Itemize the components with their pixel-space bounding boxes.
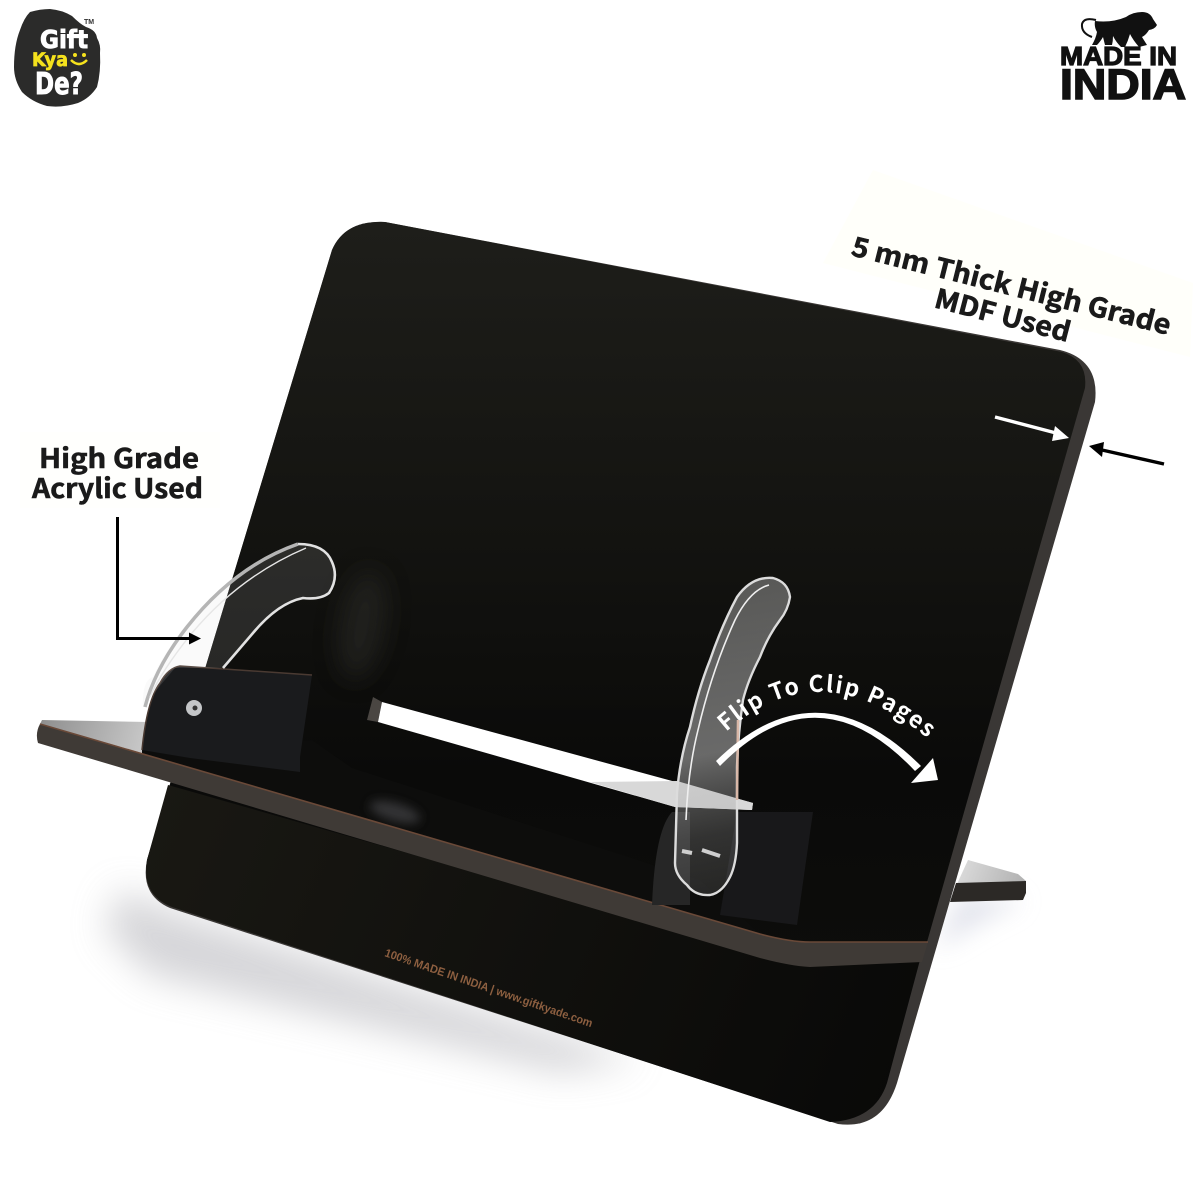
right acrylic clip <box>675 578 790 895</box>
panel lower face <box>146 785 920 1122</box>
curved label: Flip To Clip Pages <box>716 674 934 736</box>
shelf tip top surface <box>40 720 150 754</box>
lion icon <box>1082 12 1157 47</box>
logo blob <box>14 9 100 107</box>
elbow arrow <box>118 517 201 644</box>
badge: Made in India <box>1060 12 1186 109</box>
panel front face <box>147 222 1085 1000</box>
callout: acrylic <box>31 437 203 644</box>
callout text line 1: 5 mm Thick High Grade <box>848 225 1176 343</box>
shelf brown edge line <box>40 724 928 942</box>
logo word: Gift: Gift <box>40 25 88 54</box>
logo word: Kya: Kya <box>32 49 68 71</box>
callout text line 2: MDF Used <box>931 277 1075 350</box>
callout text line 1: High Grade <box>39 437 199 476</box>
right foot of the stand <box>950 860 1026 902</box>
right mounting block <box>652 812 813 925</box>
slot in panel <box>367 697 753 810</box>
logo smile <box>71 53 87 64</box>
book stand back panel <box>146 222 1096 1125</box>
engraved brand text: 100% MADE IN INDIA | www.giftkyade.com <box>383 947 594 1030</box>
panel side edge <box>146 222 1096 1125</box>
shelf highlight <box>368 796 422 828</box>
acrylic reflection on panel <box>331 567 393 683</box>
logo trademark: TM <box>84 19 94 26</box>
white arrow <box>995 417 1069 441</box>
shelf front edge <box>37 724 928 967</box>
left acrylic clip <box>143 544 336 707</box>
floor shadow <box>105 890 1025 1072</box>
curved arrow <box>716 713 938 783</box>
screw <box>186 700 202 716</box>
left mounting block with screw <box>142 666 312 772</box>
badge line 2: INDIA <box>1060 61 1186 109</box>
logo: Gift Kya De <box>14 9 100 107</box>
shelf top surface <box>142 740 760 934</box>
badge line 1: MADE IN <box>1060 41 1177 71</box>
callout text line 2: Acrylic Used <box>31 467 203 506</box>
callout: flip to clip pages <box>716 674 938 783</box>
logo word: De?: De? <box>35 67 83 102</box>
background cream patches <box>20 170 1193 508</box>
callout: MDF thickness <box>848 225 1176 464</box>
black arrow <box>1089 442 1164 464</box>
front shelf <box>37 720 928 967</box>
